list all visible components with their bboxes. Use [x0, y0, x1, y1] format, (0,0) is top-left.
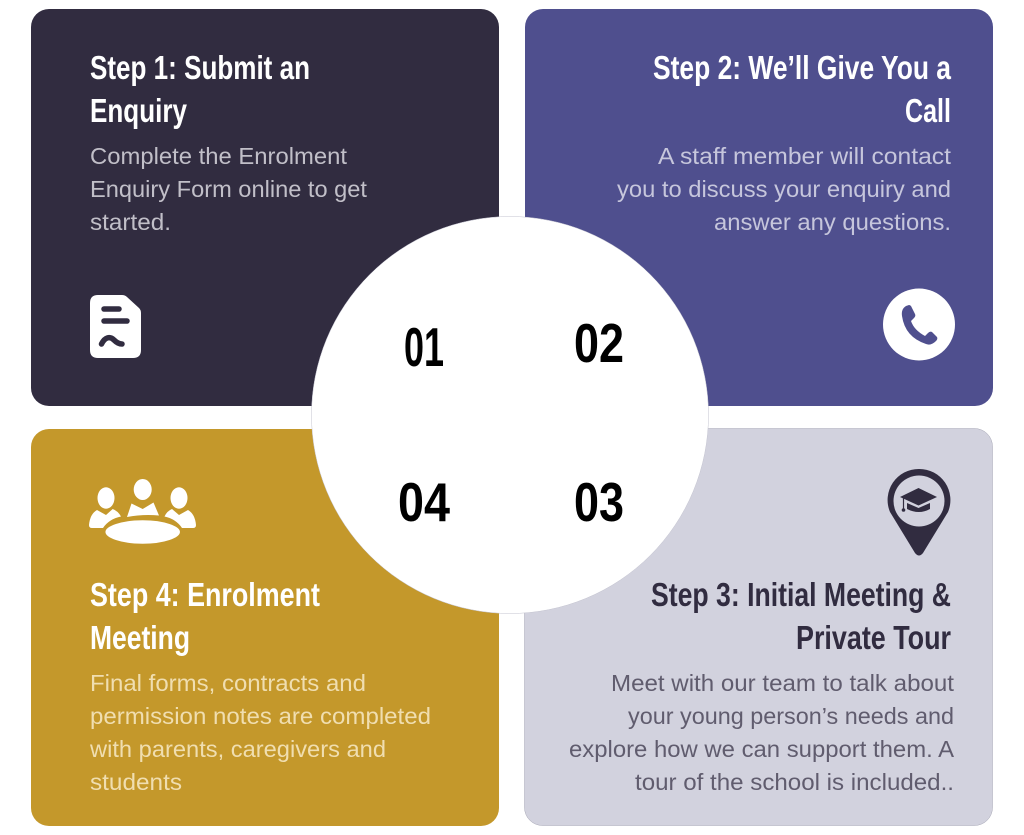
center circle	[312, 216, 708, 614]
icon: phone	[883, 288, 955, 360]
text: step 3 description: explore how we can support them. A	[569, 736, 955, 762]
heading: step 2: Call	[905, 92, 951, 129]
number 02: 02	[574, 312, 624, 374]
panel: step 4	[31, 429, 499, 826]
heading: step 1: Enquiry	[90, 92, 188, 129]
heading: step 3: Private Tour	[796, 619, 951, 656]
heading: step 4: Meeting	[90, 619, 190, 656]
text: step 1 description	[90, 143, 368, 235]
text: step 2 description: A staff member will contact	[658, 143, 952, 169]
text: step 3 description	[569, 670, 955, 795]
panel: step 3	[524, 428, 992, 826]
text: step 2 description: you to discuss your enquiry and	[617, 176, 951, 202]
text: step 1 description: Complete the Enrolment	[90, 143, 348, 169]
heading: step 3: Step 3: Initial Meeting &	[651, 576, 951, 613]
number 04: 04	[398, 471, 450, 533]
panel: step 2	[525, 9, 993, 406]
icon: meeting table	[89, 479, 196, 545]
heading: step 4	[90, 576, 320, 656]
text: step 3 description: Meet with our team to talk about	[611, 670, 955, 696]
icon: graduation location pin	[888, 469, 950, 556]
text: step 3 description: your young person’s needs and	[628, 703, 954, 729]
text: step 1 description: started.	[90, 209, 171, 235]
heading: step 3	[651, 576, 951, 656]
text: step 4 description	[89, 670, 431, 795]
number 01: 01	[404, 316, 444, 378]
text: step 1 description: Enquiry Form online to get	[90, 176, 368, 202]
text: step 4 description: with parents, caregivers and	[89, 736, 386, 762]
text: step 2 description: answer any questions.	[714, 209, 951, 235]
heading: step 1: Step 1: Submit an	[90, 49, 310, 86]
heading: step 4: Step 4: Enrolment	[90, 576, 320, 613]
text: step 4 description: students	[90, 769, 182, 795]
text: step 2 description	[617, 143, 952, 235]
panel: step 1	[31, 9, 499, 406]
icon: document	[90, 295, 141, 358]
heading: step 2	[653, 49, 952, 129]
heading: step 1	[90, 49, 310, 129]
text: step 4 description: Final forms, contracts and	[90, 670, 366, 696]
number 03: 03	[574, 471, 624, 533]
heading: step 2: Step 2: We’ll Give You a	[653, 49, 952, 86]
text: step 4 description: permission notes are completed	[90, 703, 431, 729]
text: step 3 description: tour of the school is included..	[635, 769, 954, 795]
